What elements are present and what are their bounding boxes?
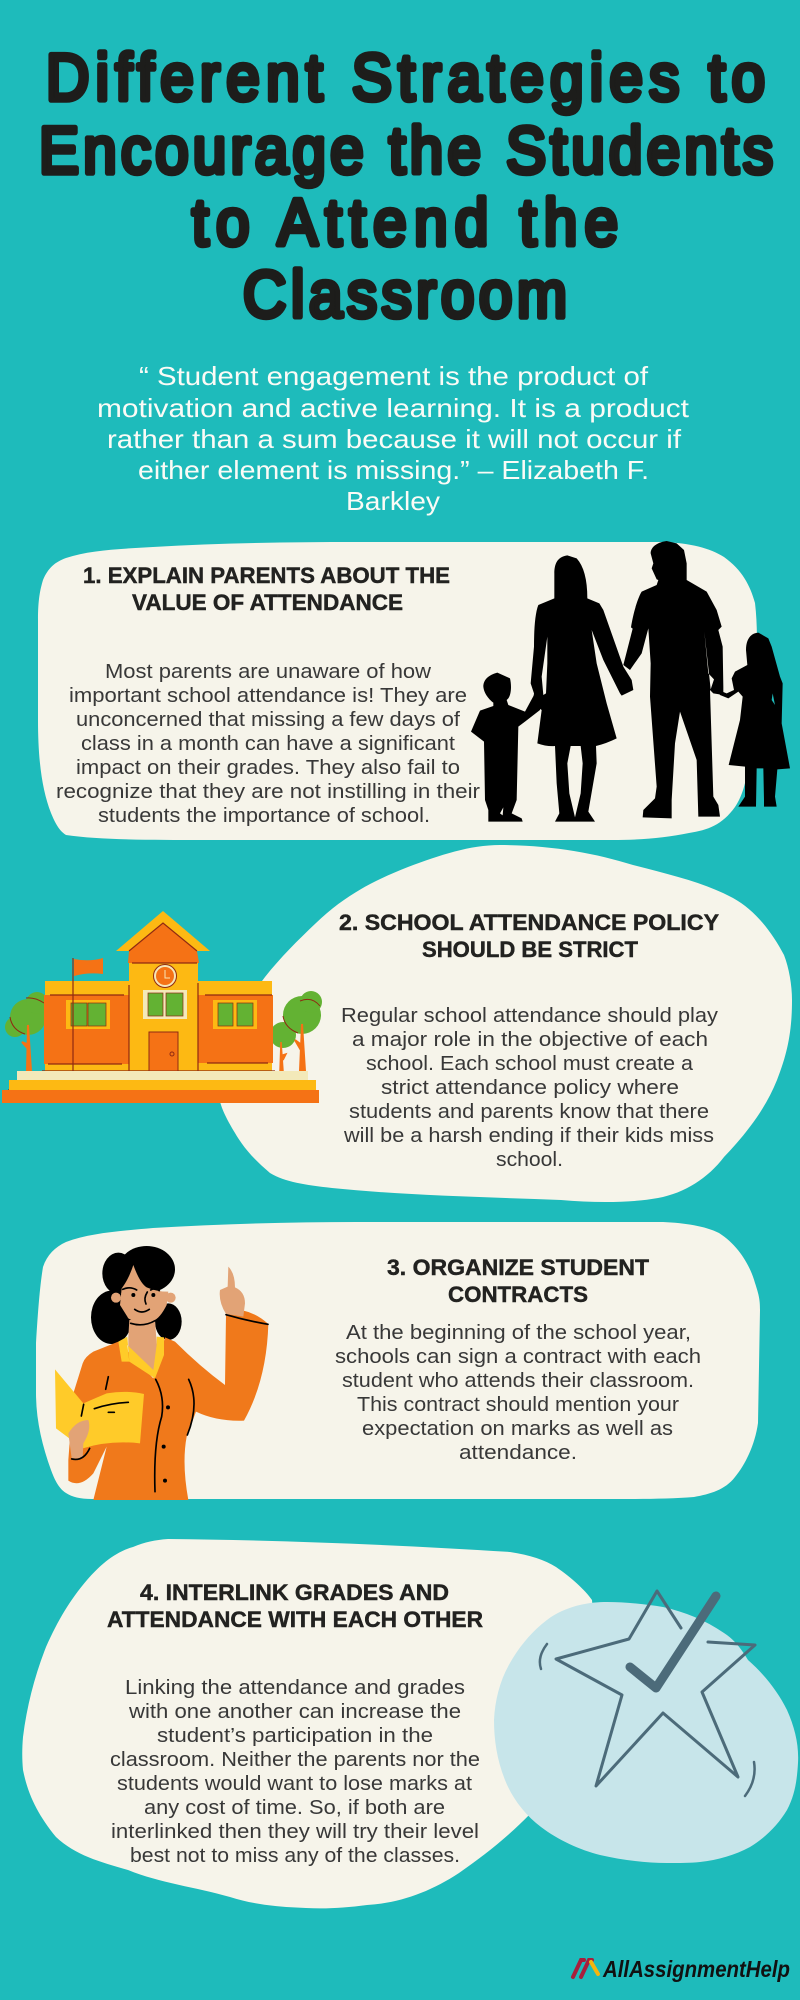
heading [83,563,450,615]
body text: unconcerned that missing a few days of [76,709,460,731]
trees [5,991,322,1071]
hair [91,1246,182,1344]
illustration: teacher with book [55,1246,268,1500]
body text: important school attendance is! They are [69,685,467,707]
body text: Most parents are unaware of how [105,661,432,683]
panel: strategy 3 [36,1222,760,1500]
illustration: school building [2,911,322,1103]
collar [118,1337,164,1378]
book [55,1369,144,1448]
logo mark [573,1960,598,1977]
wings [45,981,131,1071]
body text: This contract should mention your [357,1394,679,1416]
body text: expectation on marks as well as [362,1418,673,1440]
panel background [36,1222,760,1499]
body text: Linking the attendance and grades [125,1677,465,1699]
heading [107,1580,483,1632]
body text: school. [496,1149,563,1171]
jacket [68,1311,268,1500]
body text: will be a harsh ending if their kids miss [343,1125,714,1147]
body text [56,661,480,827]
quote: Barkley [346,486,440,516]
body text: any cost of time. So, if both are [144,1797,445,1819]
skin: neck and face [111,1265,176,1377]
body text: At the beginning of the school year, [346,1322,691,1344]
body text: classroom. Neither the parents nor the [110,1749,480,1771]
door [149,1032,178,1071]
tower [129,963,198,1071]
clock [154,964,176,988]
body text: best not to miss any of the classes. [130,1845,460,1867]
face and jacket lines [72,1288,268,1492]
quote: either element is missing.” – Elizabeth F. [138,455,649,485]
quote: rather than a sum because it will not occur if [107,424,682,454]
body text: strict attendance policy where [381,1077,679,1099]
panel: strategy 2 [2,845,792,1202]
blue blob [494,1602,798,1863]
heading: VALUE OF ATTENDANCE [132,590,403,615]
title: to Attend the [192,186,618,260]
body text: students would want to lose marks at [117,1773,472,1795]
body text: with one another can increase the [128,1701,461,1723]
body text: a major role in the objective of each [352,1029,708,1051]
body text: schools can sign a contract with each [335,1346,701,1368]
heading: 1. EXPLAIN PARENTS ABOUT THE [83,563,450,588]
body text: attendance. [459,1442,577,1464]
body text: class in a month can have a significant [81,733,455,755]
quote [97,361,690,516]
windows [143,990,187,1019]
heading: 2. SCHOOL ATTENDANCE POLICY [339,910,719,935]
title: Classroom [243,258,567,332]
raised hand [220,1267,245,1317]
icon: family silhouette [471,541,790,822]
body text: Regular school attendance should play [341,1005,718,1027]
heading: 3. ORGANIZE STUDENT [387,1255,650,1280]
panel: strategy 4 [22,1539,798,1908]
panel background [218,845,792,1202]
quote: motivation and active learning. It is a product [97,393,690,423]
body text: recognize that they are not instilling in their [56,781,480,803]
heading [339,910,719,962]
body text: students the importance of school. [98,805,430,827]
icon: star with check mark [540,1591,755,1796]
quote: “ Student engagement is the product of [139,361,649,391]
title: Encourage the Students [39,114,773,188]
body text: students and parents know that there [349,1101,709,1123]
panel background [38,542,757,840]
heading: CONTRACTS [448,1282,588,1307]
heading: ATTENDANCE WITH EACH OTHER [107,1607,483,1632]
heading [387,1255,650,1307]
body text: student’s participation in the [157,1725,433,1747]
steps [17,1071,308,1080]
title [39,41,773,332]
body text: impact on their grades. They also fail to [76,757,460,779]
hand holding book [68,1420,89,1458]
body text: school. Each school must create a [366,1053,694,1075]
heading: SHOULD BE STRICT [422,937,639,962]
body text: student who attends their classroom. [342,1370,694,1392]
body text: interlinked then they will try their level [111,1821,479,1843]
panel: strategy 1 [38,541,790,840]
logo [573,1956,790,1982]
body text [341,1005,718,1171]
heading: 4. INTERLINK GRADES AND [140,1580,449,1605]
body text [110,1677,480,1867]
body text [335,1322,701,1464]
flag [72,958,74,1071]
title: Different Strategies to [46,41,765,115]
panel background [22,1539,600,1908]
